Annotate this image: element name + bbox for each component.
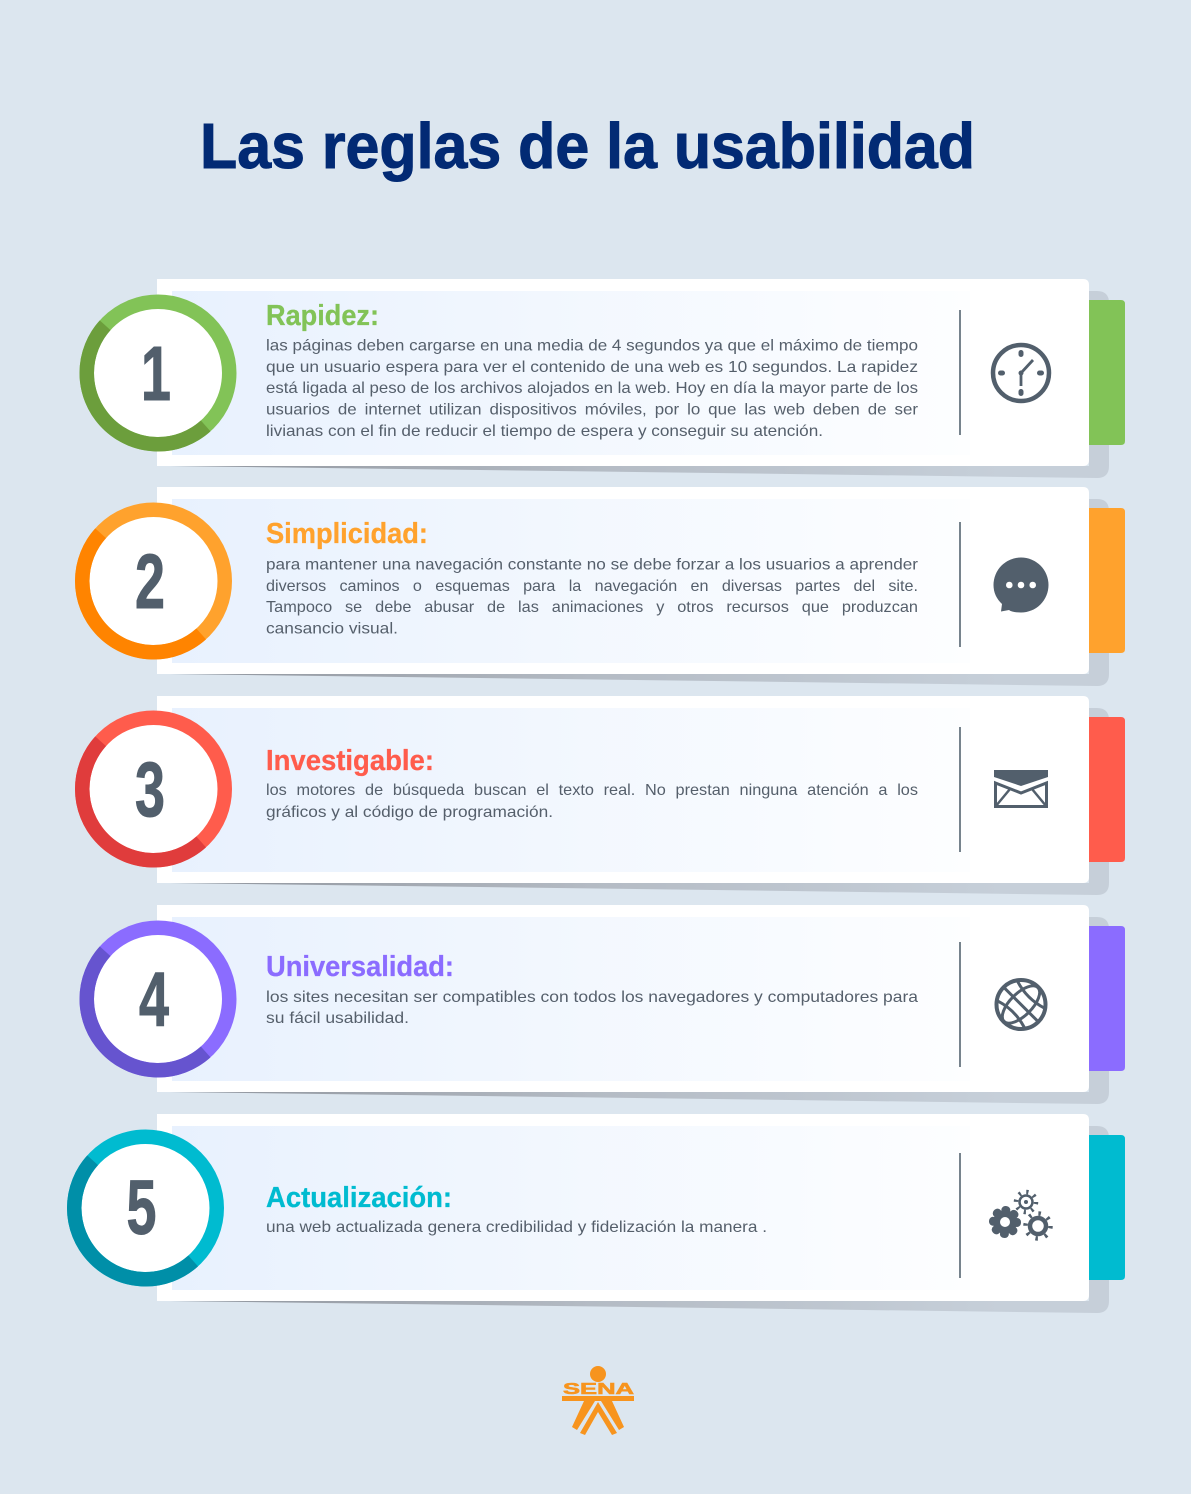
card shadow xyxy=(170,1126,1109,1313)
number badge 3 xyxy=(53,688,254,890)
body text xyxy=(266,556,918,638)
tinted panel xyxy=(172,917,970,1081)
body text xyxy=(266,782,918,821)
white card xyxy=(157,279,1089,466)
heading: Rapidez: xyxy=(266,300,379,332)
icon: clock xyxy=(993,345,1049,401)
number badge 4 xyxy=(57,898,259,1100)
tinted panel xyxy=(172,708,970,872)
body text: gráficos y al código de programación. xyxy=(266,804,553,821)
number badge 5: 5 xyxy=(127,1166,156,1251)
body text: para mantener una navegación constante no se debe forzar a los usuarios a aprender xyxy=(266,556,918,574)
colour tab xyxy=(1089,300,1125,445)
icon: speech bubble xyxy=(994,558,1048,612)
heading: Investigable: xyxy=(266,745,434,777)
body text: su fácil usabilidad. xyxy=(266,1010,409,1027)
body text: diversos caminos o esquemas para la navegación en diversas partes del site. xyxy=(266,578,918,595)
card shadow xyxy=(170,917,1109,1104)
panel: 5 Actualización xyxy=(157,1114,1125,1313)
card shadow xyxy=(170,499,1109,686)
icon: gears xyxy=(993,1192,1050,1238)
icon: globe xyxy=(986,970,1056,1039)
colour tab xyxy=(1089,508,1125,653)
body text: una web actualizada genera credibilidad y fidelización la manera . xyxy=(266,1219,767,1236)
divider xyxy=(959,1153,961,1278)
number badge 3: 3 xyxy=(135,748,165,833)
heading: Universalidad: xyxy=(266,951,454,983)
body text: Tampoco se debe abusar de las animaciones y otros recursos que produzcan xyxy=(266,599,918,616)
tinted panel xyxy=(172,1126,970,1290)
divider xyxy=(959,310,961,435)
number badge 2: 2 xyxy=(135,540,165,625)
body text: las páginas deben cargarse en una media de 4 segundos ya que el máximo de tiempo xyxy=(266,338,918,354)
heading: Simplicidad: xyxy=(266,518,428,550)
panel: 1 Rapidez xyxy=(157,279,1125,478)
panel: 3 Investigable xyxy=(157,696,1125,895)
body text: livianas con el fin de reducir el tiempo de espera y conseguir su atención. xyxy=(266,423,823,440)
white card xyxy=(157,905,1089,1092)
divider xyxy=(959,942,961,1067)
heading: Actualización: xyxy=(266,1182,452,1214)
number badge 1: 1 xyxy=(141,332,171,417)
body text xyxy=(266,989,918,1027)
tinted panel xyxy=(172,291,970,455)
logo: SENA xyxy=(562,1366,635,1435)
number badge 1 xyxy=(57,272,259,474)
divider xyxy=(959,522,961,647)
colour tab xyxy=(1089,717,1125,862)
panel: 4 Universalidad xyxy=(157,905,1125,1104)
body text: que un usuario espera para ver el contenido de una web es 10 segundos. La rapidez xyxy=(266,359,918,376)
divider xyxy=(959,727,961,852)
body text: está ligada al peso de los archivos alojados en la web. Hoy en día la mayor parte de los xyxy=(266,380,918,397)
body text: usuarios de internet utilizan dispositivos móviles, por lo que las web deben de ser xyxy=(266,402,918,418)
white card xyxy=(157,696,1089,883)
tinted panel xyxy=(172,499,970,663)
number badge 2 xyxy=(53,480,254,682)
body text: los sites necesitan ser compatibles con todos los navegadores y computadores para xyxy=(266,989,918,1006)
body text: los motores de búsqueda buscan el texto real. No prestan ninguna atención a los xyxy=(266,782,918,799)
body text xyxy=(266,338,918,440)
white card xyxy=(157,1114,1089,1301)
logo: SENA: SENA xyxy=(563,1381,635,1398)
icon: envelope xyxy=(994,770,1048,806)
number badge 5 xyxy=(45,1107,246,1309)
body text: cansancio visual. xyxy=(266,620,398,638)
card shadow xyxy=(170,708,1109,895)
white card xyxy=(157,487,1089,674)
panel: 2 Simplicidad xyxy=(157,487,1125,686)
colour tab xyxy=(1089,926,1125,1071)
number badge 4: 4 xyxy=(139,958,169,1043)
colour tab xyxy=(1089,1135,1125,1280)
title: Las reglas de la usabilidad xyxy=(200,110,975,182)
card shadow xyxy=(170,291,1109,478)
